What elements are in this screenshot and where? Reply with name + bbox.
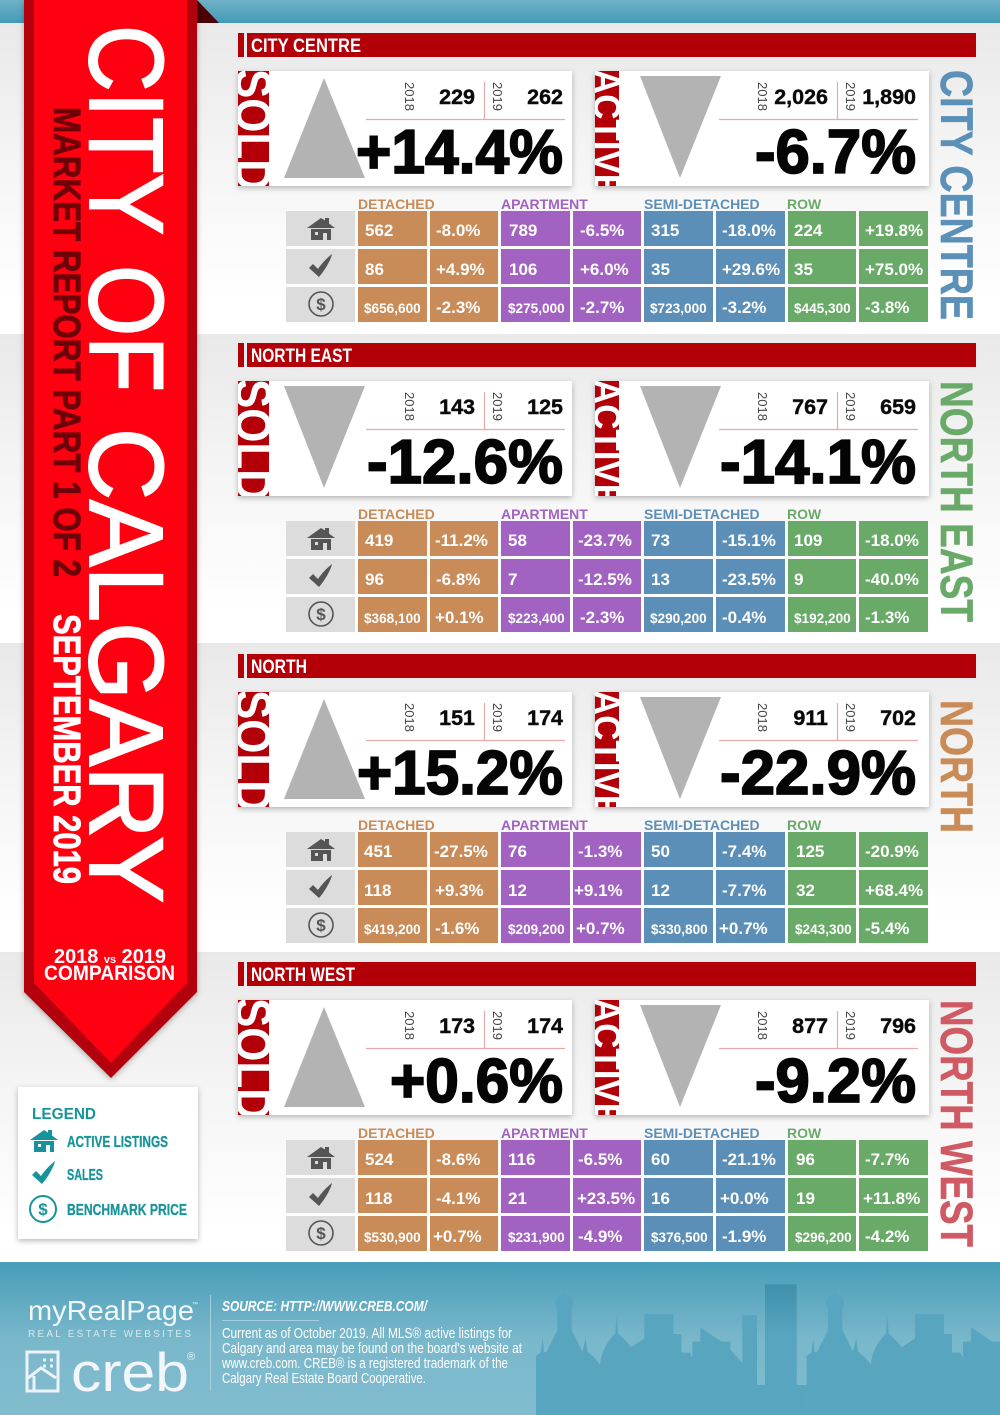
active card: 1,890: [862, 85, 916, 109]
data table: [286, 506, 928, 632]
data table: $656,600: [364, 301, 421, 316]
active card: 767: [792, 395, 828, 419]
data table: 19: [796, 1189, 815, 1208]
section: north west: [225, 962, 982, 1251]
data table: [286, 817, 928, 943]
data table: 9: [794, 570, 803, 589]
ribbon fold: [197, 0, 219, 23]
data table: +68.4%: [865, 881, 923, 900]
data table: -3.8%: [865, 298, 909, 317]
data table: -4.9%: [578, 1227, 622, 1246]
data table: +0.1%: [435, 608, 484, 627]
data table: -2.7%: [580, 298, 624, 317]
sold card: 2018: [402, 703, 417, 732]
data table: APARTMENT: [501, 506, 588, 522]
data table: 35: [651, 260, 670, 279]
data table: DETACHED: [358, 1125, 435, 1141]
data table: 224: [794, 221, 823, 240]
registered mark: ®: [187, 1351, 195, 1363]
data table: -2.3%: [436, 298, 480, 317]
section title bar: NORTH WEST: [251, 965, 355, 986]
data table: $275,000: [508, 301, 565, 316]
data table: $: [316, 916, 326, 935]
region label: NORTH: [931, 700, 982, 833]
active card: [585, 998, 929, 1126]
data table: -7.7%: [722, 881, 766, 900]
active card: 2018: [755, 1011, 770, 1040]
data table: 13: [651, 570, 670, 589]
data table: -12.5%: [578, 570, 632, 589]
sold card: SOLD: [225, 998, 281, 1120]
data table: 419: [365, 531, 393, 550]
sold card: 2019: [490, 703, 505, 732]
data table: 96: [796, 1150, 815, 1169]
sold card: [225, 998, 572, 1120]
active card: 2,026: [774, 85, 828, 109]
data table: $290,200: [650, 611, 707, 626]
active card: 911: [793, 706, 828, 730]
active card: 2019: [843, 392, 858, 421]
sold card: [225, 690, 572, 812]
data table: +6.0%: [580, 260, 629, 279]
logo: myRealPage: myRealPage: [28, 1295, 194, 1326]
active card: -22.9%: [720, 739, 916, 808]
data table: DETACHED: [358, 506, 435, 522]
data table: 106: [509, 260, 537, 279]
data table: 109: [794, 531, 822, 550]
active card: [585, 690, 929, 818]
data table: -3.2%: [722, 298, 766, 317]
region label: CITY CENTRE: [931, 70, 982, 320]
data table: $376,500: [651, 1230, 708, 1245]
sold card: +15.2%: [357, 739, 563, 808]
section: north: [225, 654, 982, 943]
data table: APARTMENT: [501, 196, 588, 212]
disclaimer: Current as of October 2019. All MLS® active listings for: [222, 1326, 512, 1342]
data table: 35: [794, 260, 813, 279]
icon: dollar: [30, 1196, 56, 1222]
region label: NORTH WEST: [931, 1000, 982, 1247]
sold card: SOLD: [225, 690, 281, 812]
active card: 877: [792, 1014, 828, 1038]
sold card: 2018: [402, 82, 417, 111]
section title bar: [238, 33, 976, 57]
data table: -7.4%: [722, 842, 766, 861]
data table: 16: [651, 1189, 670, 1208]
data table: 315: [651, 221, 679, 240]
data table: [286, 196, 928, 322]
data table: +0.7%: [433, 1227, 482, 1246]
data table: +0.7%: [719, 919, 768, 938]
sold card: 2018: [402, 1011, 417, 1040]
active card: 2018: [755, 82, 770, 111]
data table: -8.0%: [436, 221, 480, 240]
data table: +0.7%: [576, 919, 625, 938]
data table: ROW: [787, 1125, 822, 1141]
title: CALGARY: [67, 428, 184, 903]
data table: 12: [508, 881, 527, 900]
comparison label: COMPARISON: [44, 962, 175, 985]
region label: NORTH EAST: [931, 381, 982, 622]
active card: -6.7%: [755, 118, 916, 187]
data table: 116: [508, 1150, 535, 1169]
subtitle: MARKET REPORT PART 1 OF 2: [45, 107, 87, 577]
section title bar: CITY CENTRE: [251, 36, 361, 57]
data table: -8.6%: [436, 1150, 480, 1169]
data table: 7: [508, 570, 517, 589]
data table: +11.8%: [863, 1189, 920, 1208]
data table: +23.5%: [577, 1189, 635, 1208]
comparison label: 2018 vs 2019: [54, 946, 166, 968]
data table: -1.3%: [865, 608, 909, 627]
data table: 73: [651, 531, 670, 550]
sold card: 174: [527, 1014, 563, 1038]
data table: -1.3%: [578, 842, 622, 861]
sold card: 125: [527, 395, 563, 419]
active card: 2018: [755, 703, 770, 732]
data table: -23.5%: [722, 570, 776, 589]
data table: 58: [508, 531, 527, 550]
active card: -9.2%: [755, 1047, 916, 1116]
data table: $445,300: [794, 301, 851, 316]
data table: $209,200: [508, 922, 565, 937]
legend sales: SALES: [67, 1167, 103, 1184]
section title bar: [238, 654, 976, 678]
sold card: 2019: [490, 82, 505, 111]
data table: 118: [364, 881, 391, 900]
data table: 60: [651, 1150, 670, 1169]
sold card: 229: [439, 85, 475, 109]
trademark: ™: [192, 1301, 198, 1308]
active card: 796: [880, 1014, 916, 1038]
data table: 96: [365, 570, 384, 589]
sold card: SOLD: [225, 69, 281, 191]
sold card: [225, 379, 572, 501]
icon: house: [30, 1130, 58, 1152]
data table: SEMI-DETACHED: [644, 817, 760, 833]
data table: 12: [651, 881, 670, 900]
data table: -7.7%: [865, 1150, 909, 1169]
data table: 125: [796, 842, 824, 861]
data table: -27.5%: [434, 842, 488, 861]
active card: 659: [880, 395, 916, 419]
data table: 524: [365, 1150, 394, 1169]
active card: ACTIVE: [585, 690, 627, 818]
data table: 789: [509, 221, 537, 240]
data table: SEMI-DETACHED: [644, 506, 760, 522]
active card: 2018: [755, 392, 770, 421]
sold card: +0.6%: [390, 1047, 563, 1116]
data table: 21: [508, 1189, 527, 1208]
disclaimer: Calgary and area may be found on the board's website at: [222, 1341, 522, 1357]
data table: $419,200: [364, 922, 421, 937]
data table: +0.0%: [720, 1189, 769, 1208]
date: SEPTEMBER 2019: [45, 614, 87, 884]
active card: 2019: [843, 82, 858, 111]
data table: -1.9%: [722, 1227, 766, 1246]
sold card: 2019: [490, 1011, 505, 1040]
icon: dollar: $: [38, 1200, 48, 1219]
active card: [585, 379, 929, 507]
data table: 118: [365, 1189, 392, 1208]
section title bar: [238, 343, 976, 367]
data table: -18.0%: [865, 531, 919, 550]
legend heading: LEGEND: [32, 1106, 96, 1123]
legend active listings: ACTIVE LISTINGS: [67, 1134, 168, 1151]
data table: +75.0%: [865, 260, 923, 279]
data table: ROW: [787, 817, 822, 833]
data table: APARTMENT: [501, 1125, 588, 1141]
data table: ROW: [787, 506, 822, 522]
data table: 32: [796, 881, 815, 900]
disclaimer: [221, 1326, 522, 1387]
sold card: -12.6%: [367, 428, 563, 497]
title: OF: [67, 265, 184, 392]
data table: -5.4%: [865, 919, 909, 938]
data table: -20.9%: [865, 842, 919, 861]
data table: 76: [508, 842, 527, 861]
data table: 451: [364, 842, 392, 861]
section: north east: [225, 343, 982, 632]
data table: $723,000: [650, 301, 707, 316]
sold card: 143: [439, 395, 475, 419]
data table: -4.2%: [865, 1227, 909, 1246]
data table: 562: [365, 221, 393, 240]
data table: -15.1%: [722, 531, 776, 550]
data table: DETACHED: [358, 817, 435, 833]
data table: +9.1%: [574, 881, 623, 900]
sold card: 262: [527, 85, 563, 109]
data table: -6.5%: [578, 1150, 622, 1169]
data table: +9.3%: [435, 881, 484, 900]
ribbon banner: [24, 0, 197, 1078]
section title bar: [238, 962, 976, 986]
legend benchmark price: BENCHMARK PRICE: [67, 1202, 187, 1219]
title: CITY: [67, 25, 184, 235]
data table: $330,800: [651, 922, 708, 937]
icon: check: [32, 1161, 55, 1184]
data table: $296,200: [795, 1230, 852, 1245]
data table: +4.9%: [436, 260, 485, 279]
logo: creb: creb: [71, 1341, 189, 1403]
disclaimer: www.creb.com. CREB® is a registered trademark of the: [221, 1356, 508, 1372]
data table: +29.6%: [722, 260, 780, 279]
data table: -0.4%: [722, 608, 766, 627]
data table: ROW: [787, 196, 822, 212]
data table: $192,200: [794, 611, 851, 626]
sold card: SOLD: [225, 379, 281, 501]
data table: -11.2%: [435, 531, 488, 550]
data table: $243,300: [795, 922, 852, 937]
icon: creb building: [27, 1352, 58, 1391]
data table: -18.0%: [722, 221, 776, 240]
sold card: 173: [439, 1014, 475, 1038]
sold card: 2019: [490, 392, 505, 421]
data table: +19.8%: [865, 221, 923, 240]
title: [67, 25, 184, 903]
section title bar: NORTH EAST: [251, 346, 352, 367]
data table: -1.6%: [435, 919, 479, 938]
data table: SEMI-DETACHED: [644, 1125, 760, 1141]
data table: 50: [651, 842, 670, 861]
disclaimer: Calgary Real Estate Board Cooperative.: [222, 1371, 426, 1387]
legend: [18, 1087, 198, 1239]
skyline: [536, 1277, 1000, 1415]
data table: 86: [365, 260, 384, 279]
data table: $231,900: [508, 1230, 565, 1245]
data table: -23.7%: [578, 531, 632, 550]
active card: ACTIVE: [585, 69, 627, 197]
data table: $: [316, 295, 326, 314]
sold card: 2018: [402, 392, 417, 421]
logo tagline: REAL ESTATE WEBSITES: [28, 1329, 191, 1340]
section title bar: NORTH: [251, 657, 307, 678]
data table: -40.0%: [865, 570, 919, 589]
active card: -14.1%: [720, 428, 916, 497]
active card: ACTIVE: [585, 998, 627, 1126]
data table: -4.1%: [436, 1189, 480, 1208]
active card: [585, 69, 929, 197]
sold card: 151: [439, 706, 475, 730]
data table: -2.3%: [580, 608, 624, 627]
sold card: [225, 69, 572, 191]
source: SOURCE: HTTP://WWW.CREB.COM/: [222, 1298, 428, 1315]
active card: 2019: [843, 1011, 858, 1040]
data table: $530,900: [364, 1230, 421, 1245]
data table: $: [316, 1224, 326, 1243]
footer: [0, 1262, 1000, 1415]
data table: $: [316, 605, 326, 624]
divider: [210, 1295, 211, 1391]
top teal band: [0, 0, 1000, 23]
data table: APARTMENT: [501, 817, 588, 833]
sold card: 174: [527, 706, 563, 730]
active card: ACTIVE: [585, 379, 627, 507]
data table: [286, 1125, 928, 1251]
data table: DETACHED: [358, 196, 435, 212]
data table: -6.5%: [580, 221, 624, 240]
sold card: +14.4%: [356, 118, 563, 187]
data table: $368,100: [364, 611, 421, 626]
data table: $223,400: [508, 611, 565, 626]
data table: SEMI-DETACHED: [644, 196, 760, 212]
active card: 702: [880, 706, 916, 730]
data table: -6.8%: [436, 570, 480, 589]
comparison label: [44, 946, 175, 985]
section: city centre: [225, 33, 982, 322]
data table: -21.1%: [722, 1150, 776, 1169]
active card: 2019: [843, 703, 858, 732]
